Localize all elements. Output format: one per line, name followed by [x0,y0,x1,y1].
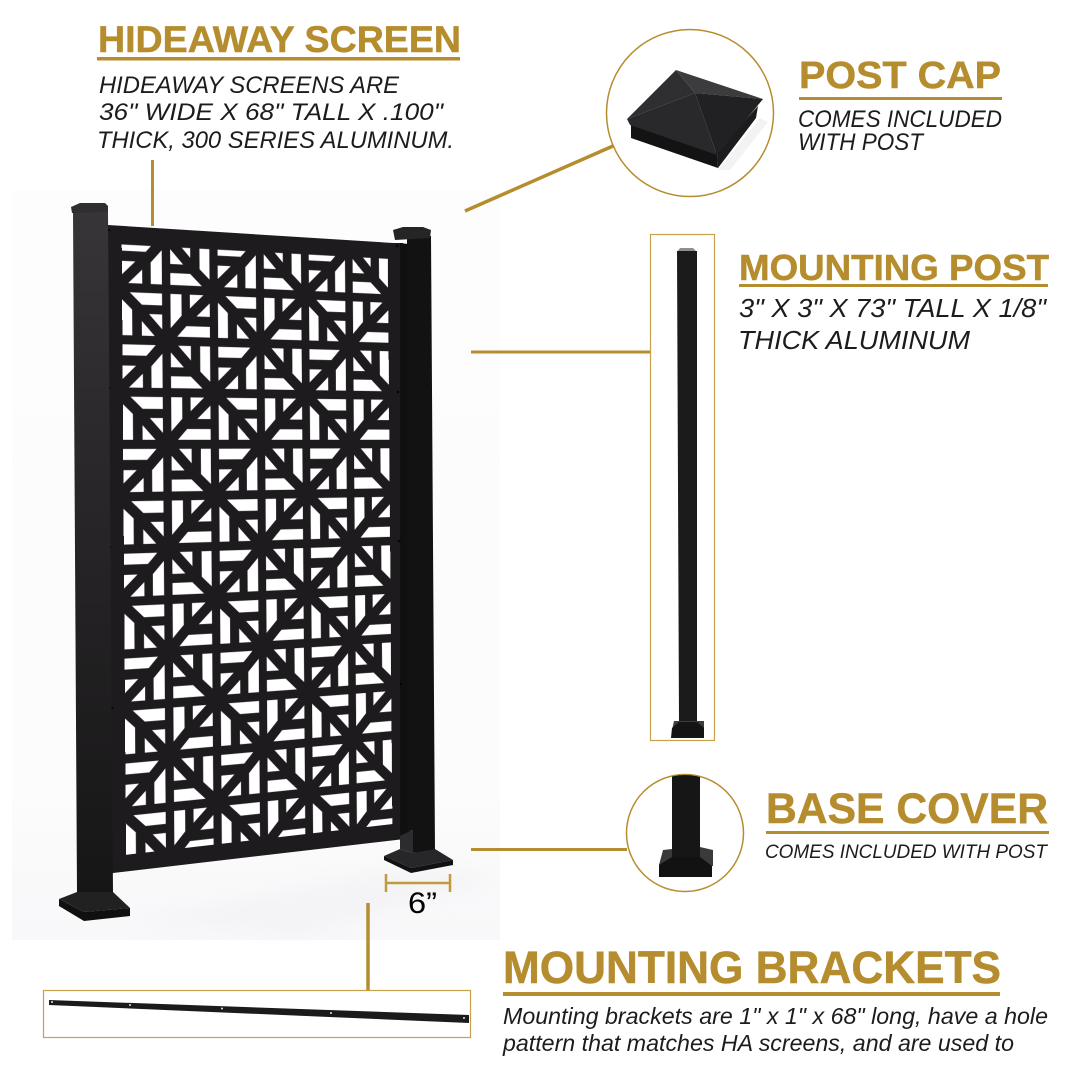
heading: hideaway screen: HIDEAWAY SCREEN [98,19,461,60]
right post cap [393,227,431,240]
text: mounting brackets description: Mounting brackets are 1" x 1" x 68" long, have a hole [503,1003,1048,1029]
post base plate [671,721,704,738]
post shaft [677,251,697,722]
heading: post cap: POST CAP [799,55,1001,97]
bracket holes [51,1001,465,1019]
heading: mounting post: MOUNTING POST [739,247,1049,288]
base cover front [659,857,712,877]
text: base cover note: COMES INCLUDED WITH POST [765,841,1049,863]
bracket bar [49,1000,469,1023]
circle detail: base cover [626,772,744,892]
screen panel [108,225,413,873]
left post base [59,892,130,921]
left post cap [71,203,108,213]
bracket image box [44,990,470,1038]
left post [73,212,113,892]
text: hideaway screen description: HIDEAWAY SCREENS ARE [99,72,400,99]
cap shadow [718,118,768,170]
dimension: 6 inch base [386,874,450,920]
heading: base cover: BASE COVER [766,785,1048,833]
text: post cap note [798,106,1002,156]
dimension: 6 inch base: 6” [408,887,437,920]
heading: mounting brackets: MOUNTING BRACKETS [503,942,1001,993]
text: mounting brackets description: pattern that matches HA screens, and are used to [502,1030,1014,1056]
text: mounting post dimensions: THICK ALUMINUM [738,325,970,355]
leader line: base cover [471,848,627,851]
post cap top [677,248,697,256]
text: mounting post dimensions: 3" X 3" X 73" TALL X 1/8" [739,293,1048,323]
text: post cap note: WITH POST [798,129,925,156]
cap face front [627,93,717,155]
cap face left [627,70,695,119]
product photo: hideaway screen with posts [59,203,453,921]
panel bolts [108,229,402,709]
right post [400,236,435,853]
panel mounting bracket flange [400,243,408,834]
text: hideaway screen description: 36" WIDE X 68" TALL X .100" [99,99,445,126]
leader line: mounting post [471,350,650,354]
mounting post image box [650,234,714,740]
text: hideaway screen description [97,72,454,154]
photo backdrop [12,190,500,940]
text: mounting post dimensions [738,293,1048,355]
base cover plate top [659,847,713,866]
screen cut-out pattern [122,244,392,855]
text: mounting brackets description [502,1003,1048,1056]
cap face top [676,70,763,99]
leader line: post cap [465,146,613,211]
cap skirt right [717,106,758,168]
right post base [384,849,453,873]
circle detail: post cap [606,30,774,196]
text: hideaway screen description: THICK, 300 SERIES ALUMINUM. [97,127,454,154]
right post lower side [400,830,413,853]
text: post cap note: COMES INCLUDED [798,106,1002,133]
cap skirt left [631,122,718,168]
leader line: hideaway screen [151,160,154,226]
cap face right [695,93,763,155]
leader line: mounting brackets [366,903,370,990]
base cover post [672,772,700,857]
